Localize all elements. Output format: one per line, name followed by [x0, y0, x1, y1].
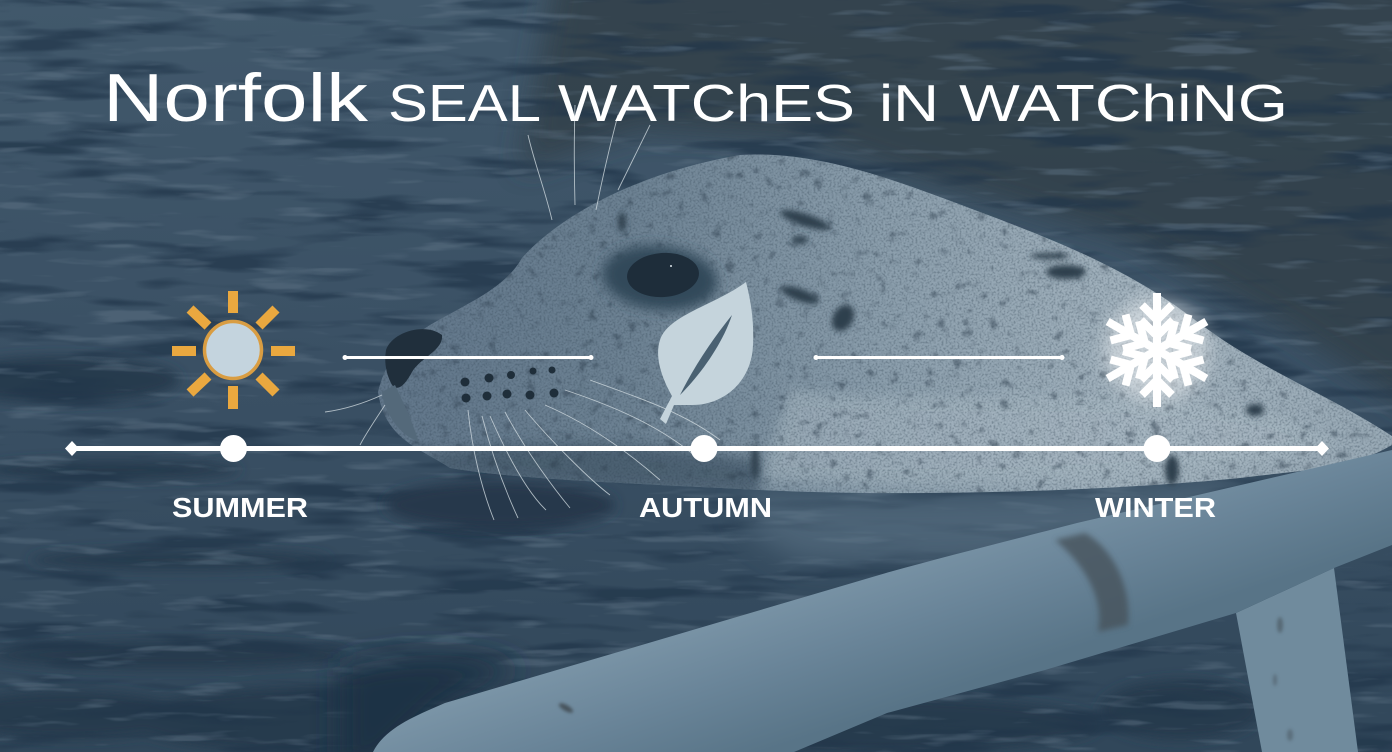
connector: summer to autumn [342, 355, 594, 360]
title: WATChES [558, 75, 855, 133]
railing wear marks [558, 533, 1293, 741]
season labels: AUTUMN [639, 492, 772, 523]
season labels: WINTER [1095, 492, 1216, 523]
dark brownish water, upper right [520, 0, 1392, 440]
whisker spots [460, 366, 558, 402]
seal nose [385, 329, 442, 388]
seal mouth [382, 385, 418, 440]
connector: autumn to winter [814, 355, 1064, 360]
title: Norfolk [103, 60, 369, 136]
season labels: SUMMER [172, 492, 308, 523]
seal body silhouette [378, 154, 1392, 493]
title: SEAL [388, 75, 541, 133]
railing bar [373, 450, 1392, 752]
shading and light fur [378, 150, 1392, 500]
railing leg [1236, 568, 1358, 752]
title [103, 60, 1288, 136]
icon: sun (summer) [172, 291, 295, 409]
title: WATChiNG [959, 75, 1288, 133]
seal dark spots [618, 206, 1264, 485]
title: iN [879, 75, 939, 133]
season labels [172, 492, 1216, 523]
timeline [65, 435, 1329, 462]
deep water near rail end [340, 655, 520, 752]
whiskers [325, 105, 720, 520]
icon: snowflake (winter) [1100, 293, 1214, 407]
seal [325, 105, 1392, 520]
railing [373, 450, 1392, 752]
seal eye [599, 240, 721, 316]
reflection beneath seal [385, 481, 615, 529]
icon: leaf (autumn) [658, 282, 753, 424]
